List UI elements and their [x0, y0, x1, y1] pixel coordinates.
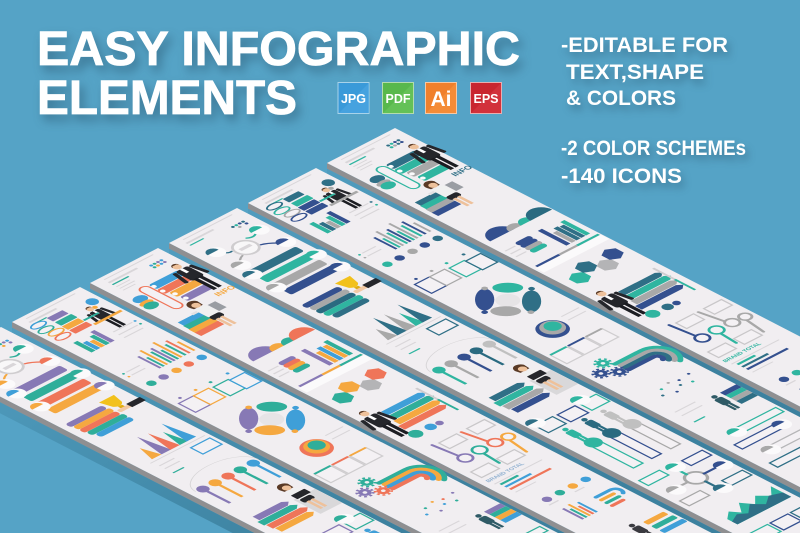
circle row [144, 354, 209, 387]
sheet header [24, 290, 106, 333]
notes and dots [357, 227, 466, 283]
scatter dots [642, 372, 740, 422]
branching tree diagram [425, 419, 539, 478]
ring with arms [0, 341, 64, 391]
businessman at top [313, 183, 369, 212]
title: ELEMENTS [37, 72, 297, 125]
small bars [282, 191, 329, 215]
oval outlines [264, 200, 310, 224]
panel: isometric sheet 3, cool scheme [153, 207, 800, 533]
arrow stack [250, 498, 319, 533]
hexagons [557, 246, 636, 286]
feature list: TEXT,SHAPE [566, 61, 704, 84]
outlined pill and blobs [360, 165, 422, 197]
feature list: -140 ICONS [561, 165, 682, 188]
outlined bars with domes [481, 525, 602, 533]
small bars [46, 310, 93, 334]
icon: JPG [338, 82, 369, 114]
BRAND TOTAL label: BRAND TOTAL [485, 462, 527, 483]
silhouettes with long bars [322, 524, 446, 533]
presenter figure [348, 405, 418, 441]
INFO label: INFO [448, 164, 476, 178]
feature list: -2 COLOR SCHEMEs [561, 137, 746, 160]
icon: EPS: EPS [473, 92, 499, 106]
businessman at top [77, 302, 133, 331]
thin bar chart [131, 335, 196, 369]
spike triangles [353, 299, 462, 355]
outlined pill and blobs [123, 285, 185, 317]
bar chart [71, 330, 115, 352]
area chart [717, 486, 791, 524]
sheet header [103, 254, 173, 291]
feature list: & COLORS [566, 87, 676, 110]
branching tree diagram [662, 299, 776, 358]
seated woman figure [183, 299, 239, 328]
sheet header [340, 134, 410, 171]
hexagons [320, 366, 399, 406]
circle row [538, 476, 597, 506]
brand total bars [731, 339, 798, 374]
oval outlines [28, 319, 74, 343]
sheet header [0, 333, 13, 369]
icon: JPG: JPG [341, 92, 366, 106]
stacked bars, lower [413, 191, 461, 216]
outlined box [191, 438, 222, 454]
stacked bars [148, 270, 214, 304]
boxes row [750, 503, 800, 533]
curled ribbon [379, 461, 450, 498]
column chart [301, 339, 353, 366]
star diagram [638, 447, 760, 510]
icon: PDF: PDF [386, 92, 411, 106]
panel: isometric sheet 2, cool scheme [232, 167, 800, 533]
woman at podium [507, 358, 578, 395]
long bars [2, 360, 119, 420]
arrow banners [376, 390, 452, 430]
sheet header [260, 172, 342, 214]
progress bar [533, 233, 609, 273]
pill stack [502, 235, 549, 260]
table of three [549, 328, 619, 364]
outlined bars with domes [717, 406, 800, 469]
arrow banners [613, 270, 689, 310]
table of three [313, 447, 383, 483]
concentric circles [292, 424, 363, 461]
stacked bars, lower [176, 311, 224, 336]
title: EASY INFOGRAPHIC [37, 23, 520, 76]
INFO label: INFO [211, 284, 239, 298]
feature list: -EDITABLE FOR [561, 34, 728, 57]
desk [428, 181, 464, 200]
panel: isometric sheet 1, cool scheme [311, 126, 800, 516]
woman at podium [271, 477, 342, 514]
icon: Ai [426, 82, 456, 114]
panel: isometric sheet 5, warm scheme [0, 286, 750, 533]
brand total bars [494, 459, 561, 494]
icon: PDF [382, 82, 414, 114]
long bars [238, 241, 355, 301]
circle row [775, 356, 800, 386]
pill stack [265, 355, 312, 380]
gears [344, 476, 395, 502]
concentric circles [528, 305, 599, 342]
long bars [319, 186, 359, 207]
BRAND TOTAL label: BRAND TOTAL [722, 342, 764, 363]
vertical progress [415, 388, 459, 410]
lollipop chart [177, 450, 287, 506]
tabbed boxes [286, 509, 374, 533]
curled ribbon [615, 342, 686, 379]
seated woman figure [420, 179, 476, 208]
long bars [83, 305, 123, 326]
scatter dots [406, 491, 504, 533]
column chart [538, 219, 590, 246]
desk [191, 301, 227, 320]
oval cycle [218, 392, 326, 447]
gears [580, 357, 631, 383]
vertical progress [652, 268, 696, 290]
list lines [112, 320, 148, 338]
list lines [348, 201, 384, 219]
notes and dots [121, 346, 230, 402]
fan bars [561, 500, 598, 520]
feature list [561, 34, 746, 188]
presenter figure [585, 285, 655, 321]
trophy and bars [297, 270, 395, 321]
thin bar chart [367, 216, 432, 250]
title [37, 23, 520, 125]
lollipop chart [413, 331, 523, 387]
silhouettes with long bars [558, 405, 682, 469]
progress bar [296, 353, 372, 393]
fan bars [798, 380, 800, 400]
silhouette and stack [472, 503, 525, 530]
sheet header [181, 214, 249, 250]
circle trio [642, 298, 684, 319]
four boxes [415, 252, 498, 295]
semicircle row [241, 323, 315, 361]
semicircle row [478, 203, 552, 241]
arc stack [596, 487, 632, 506]
stacked bars [385, 150, 451, 184]
businessman figure [397, 138, 467, 174]
four boxes [179, 371, 262, 414]
silhouette and stack [708, 384, 761, 411]
arrow stack [486, 379, 555, 414]
panel: isometric sheet 4, warm scheme [74, 246, 800, 533]
icon: Ai: Ai [430, 88, 452, 111]
oval cycle [454, 273, 562, 328]
end figure and flags [626, 508, 688, 533]
panel: isometric sheet 6, warm scheme [0, 326, 672, 533]
circle trio [405, 418, 447, 439]
businessman figure [160, 258, 230, 294]
circle row [380, 234, 445, 268]
ring with arms [202, 222, 300, 272]
icon: EPS [470, 82, 502, 114]
bar chart [307, 211, 351, 233]
outlined box [427, 319, 458, 335]
spike triangles [117, 418, 226, 474]
tabbed boxes [522, 390, 610, 435]
trophy and bars [61, 389, 159, 440]
